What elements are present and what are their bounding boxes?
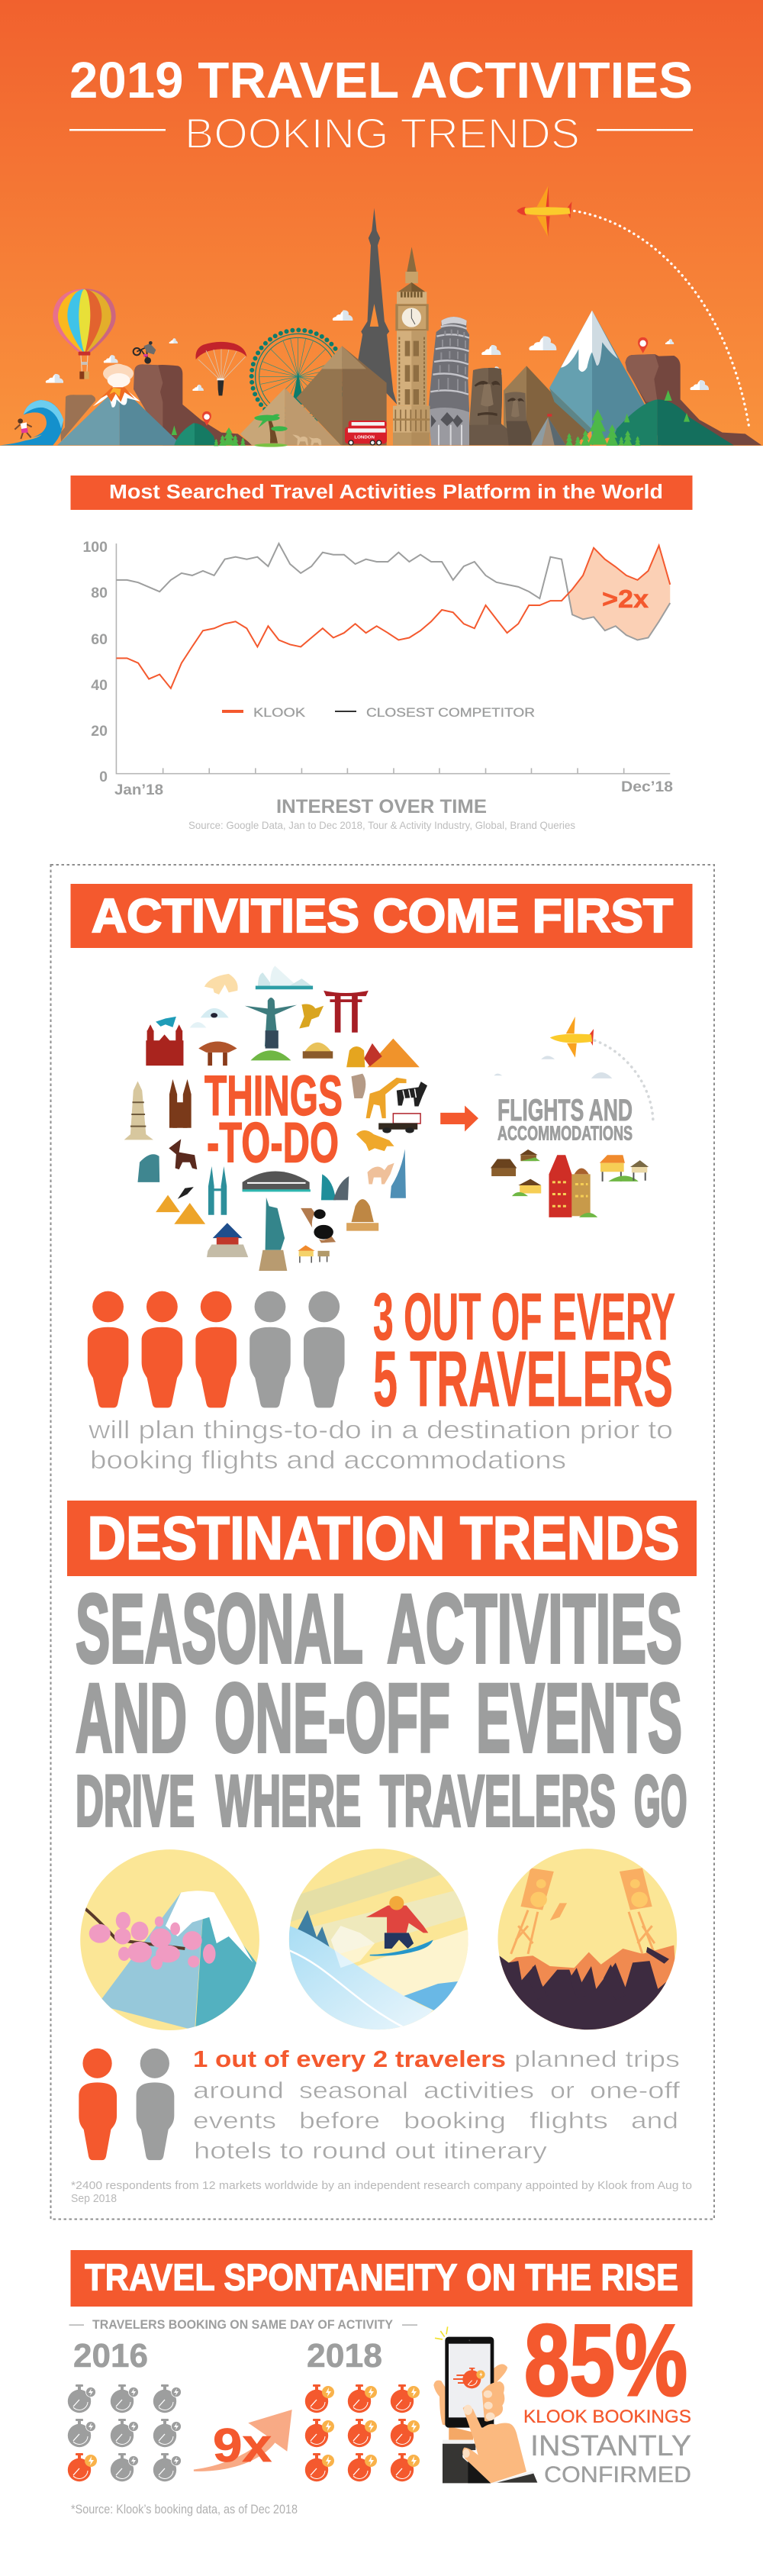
- icon: green hill and pine trees: [172, 411, 246, 446]
- icon: hot air balloon: [53, 289, 116, 379]
- text: one out of every two travelers: and: [631, 2107, 678, 2134]
- text: one out of every two travelers: events: [193, 2107, 276, 2134]
- text: GO: [634, 1761, 687, 1842]
- icon: snowy mountain: [549, 311, 645, 445]
- red cathedral: [146, 1024, 183, 1066]
- y axis labels: 0: [99, 769, 108, 785]
- illustration: travel landmarks skyline: [0, 185, 761, 447]
- icon: london bus: LONDON: [354, 435, 375, 440]
- right half of skyline: [393, 282, 761, 446]
- heading: seasonal activities and one-off events: WHERE: [216, 1761, 361, 1842]
- y axis labels: 40: [91, 677, 108, 694]
- years: 2016: [73, 2337, 148, 2374]
- text: one out of every two travelers: [193, 2046, 680, 2164]
- arrow: [440, 1105, 478, 1131]
- icon: paraglider: [195, 342, 246, 395]
- line chart: interest over time: [82, 539, 673, 831]
- icon: pine trees right: [565, 409, 641, 446]
- toucan: [178, 1187, 194, 1199]
- competitor line: [116, 543, 670, 640]
- icon: green hill: [610, 337, 734, 445]
- christ the redeemer: [245, 998, 297, 1060]
- sphinx and pyramids: [346, 1039, 420, 1067]
- text: one out of every two travelers: booking: [404, 2107, 506, 2134]
- icon: clouds right: [481, 336, 709, 390]
- temple of heaven: [207, 1223, 248, 1257]
- things to do heading: [204, 1064, 343, 1174]
- heading: seasonal activities and one-off events: [76, 1575, 687, 1842]
- x axis labels: [114, 779, 673, 798]
- text: one out of every two travelers: or: [550, 2077, 575, 2104]
- stepped pyramids: [156, 1195, 205, 1224]
- icon: big ben spire: [405, 247, 418, 283]
- text: one out of every two travelers: around: [193, 2077, 284, 2104]
- y axis labels: 20: [91, 723, 108, 740]
- text: plan things to do first: booking flights and accommodations: [90, 1446, 566, 1474]
- subheading: same day bookings: TRAVELERS BOOKING ON SAME DAY OF ACTIVITY: [92, 2318, 393, 2332]
- text: one out of every two travelers: planned trips: [514, 2046, 680, 2072]
- icon: tent: [532, 414, 566, 445]
- x axis labels: Dec’18: [621, 779, 673, 795]
- y axis labels: 60: [91, 631, 108, 648]
- butterflies: [156, 1017, 176, 1027]
- torii gate: [324, 991, 369, 1033]
- panda: [301, 1208, 336, 1243]
- igloos: [190, 1008, 229, 1027]
- stat: 9x: 9x: [213, 2420, 272, 2472]
- burj al arab: [391, 1149, 406, 1198]
- tower: [124, 1082, 153, 1140]
- flights and accommodations heading: FLIGHTS AND: [497, 1094, 633, 1127]
- text: plan things to do first: will plan things-to-do in a destination prior to: [88, 1415, 673, 1444]
- icon: london bus: [345, 421, 387, 445]
- legend: CLOSEST COMPETITOR: [366, 705, 535, 720]
- footnote: booking data source: *Source: Klook’s booking data, as of Dec 2018: [71, 2502, 298, 2516]
- text: klook bookings instantly confirmed: [523, 2407, 691, 2487]
- left half of skyline: [0, 289, 387, 447]
- icon: biker on rock: [134, 341, 156, 364]
- flights and accommodations heading: ACCOMMODATIONS: [497, 1124, 633, 1145]
- text: one out of every two travelers: 1 out of every 2 travelers: [193, 2046, 506, 2072]
- text: plan things to do first: [88, 1415, 673, 1474]
- text: one out of every two travelers: one-off: [590, 2077, 680, 2104]
- banner: travel spontaneity: TRAVEL SPONTANEITY ON THE RISE: [85, 2258, 678, 2299]
- illustration: concert crowd: [497, 1849, 679, 2030]
- safari jeep: [378, 1114, 420, 1133]
- callout: >2x: >2x: [602, 585, 649, 613]
- icon: tall rock right: [625, 354, 761, 445]
- banner: activities come first: ACTIVITIES COME FIRST: [92, 890, 673, 943]
- dome: [303, 1043, 333, 1059]
- text: one out of every two travelers: hotels to round out itinerary: [194, 2137, 548, 2164]
- buddha: [346, 1199, 378, 1231]
- text: one out of every two travelers: activities: [423, 2077, 534, 2104]
- stilt huts: [298, 1245, 330, 1263]
- stat: 3 out of every 5 travelers: [373, 1280, 675, 1423]
- icons: one of two people: [79, 2049, 174, 2160]
- icon: tall rock: [134, 364, 253, 445]
- asian gate: [198, 1042, 237, 1066]
- y axis labels: 80: [91, 585, 108, 601]
- icon: moai statues: [463, 368, 532, 445]
- heading: seasonal activities and one-off events: DRIVE: [76, 1761, 195, 1842]
- years: 2018: [307, 2337, 382, 2374]
- heading: seasonal activities and one-off events: ONE-OFF: [214, 1664, 450, 1773]
- banner: destination trends: DESTINATION TRENDS: [87, 1504, 679, 1572]
- title: 2019 TRAVEL ACTIVITIES: [69, 52, 693, 109]
- moai blue: [137, 1154, 159, 1182]
- icon: eiffel tower: [358, 208, 397, 405]
- icon: volcano mountain: [57, 364, 182, 445]
- icons: accommodation buildings: [491, 1149, 649, 1217]
- years: [73, 2337, 382, 2374]
- statue of liberty: [259, 1198, 287, 1271]
- icon: airplane with dotted path: [517, 185, 749, 430]
- x axis labels: Jan’18: [114, 782, 163, 798]
- icons: 2016 stopwatches: [68, 2384, 182, 2481]
- icon: clouds left: [46, 310, 353, 391]
- header background: [0, 0, 763, 446]
- icon: leaning tower of pisa: [429, 317, 469, 445]
- camel: [368, 1163, 394, 1184]
- shaded gap area: [568, 546, 670, 640]
- chart axes and ticks: [116, 543, 670, 774]
- koala: [351, 1074, 365, 1098]
- legend: [222, 705, 535, 720]
- harbour bridge: [243, 1171, 311, 1191]
- icon: ferris wheel: [252, 330, 345, 423]
- text: klook bookings instantly confirmed: INSTANTLY: [530, 2430, 691, 2462]
- icon: hand with phone: [433, 2326, 537, 2483]
- icons: 2018 stopwatches: [305, 2384, 420, 2481]
- polar bear: [204, 974, 238, 995]
- y axis labels: [82, 539, 108, 785]
- flights and accommodations heading: [497, 1094, 633, 1145]
- axis title: INTEREST OVER TIME: [276, 796, 487, 817]
- footnote: survey respondents: *2400 respondents from 12 markets worldwide by an independent research company appointed by Klook from Aug to: [71, 2179, 692, 2192]
- opera house: [256, 966, 313, 989]
- text: one out of every two travelers: seasonal: [299, 2077, 408, 2104]
- illustration: cherry blossom and mount fuji: [80, 1849, 262, 2042]
- text: klook bookings instantly confirmed: CONFIRMED: [544, 2462, 691, 2487]
- deer: [169, 1139, 197, 1169]
- icon: airplane and faded clouds: [494, 1017, 653, 1121]
- panel: dotted frame: [50, 865, 714, 2220]
- klook line: [116, 546, 670, 688]
- text: one out of every two travelers: before: [299, 2107, 380, 2134]
- text: one out of every two travelers: flights: [530, 2107, 608, 2134]
- icon: pyramids: [240, 346, 387, 447]
- title: [69, 52, 693, 157]
- banner: most searched platform: Most Searched Travel Activities Platform in the World: [109, 482, 663, 503]
- y axis labels: 100: [82, 539, 108, 556]
- illustration: snowboarder: [289, 1849, 468, 2030]
- things to do heading: THINGS: [204, 1064, 343, 1127]
- icon: small rock: [60, 395, 95, 441]
- footnote: survey respondents: Sep 2018: [71, 2192, 117, 2205]
- icon: big ben tower: [393, 282, 430, 445]
- lion: [356, 1130, 394, 1151]
- arrow: growth: [194, 2410, 292, 2471]
- icon: surfer on wave: [0, 400, 63, 445]
- icons: three of five people: [88, 1291, 345, 1407]
- zebra: [397, 1082, 427, 1106]
- title: BOOKING TRENDS: [185, 109, 580, 157]
- icons: things to do landmarks circle: [124, 966, 427, 1271]
- kangaroo: [299, 1004, 324, 1029]
- gothic church: [169, 1079, 192, 1128]
- banner: travel spontaneity: [70, 2250, 693, 2307]
- icon: brown pyramid: [504, 366, 589, 445]
- footnote: survey respondents: [71, 2179, 692, 2205]
- source note: Source: Google Data, Jan to Dec 2018, Tour & Activity Industry, Global, Brand Queries: [188, 819, 575, 831]
- legend: KLOOK: [253, 705, 306, 720]
- heading: seasonal activities and one-off events: SEASONAL: [76, 1575, 363, 1684]
- text: klook bookings instantly confirmed: KLOOK BOOKINGS: [523, 2407, 691, 2427]
- giraffe: [366, 1078, 407, 1118]
- heading: seasonal activities and one-off events: AND: [76, 1664, 187, 1773]
- app stopwatch glyph: [453, 2368, 485, 2388]
- twin towers: [208, 1166, 227, 1215]
- things to do heading: -TO-DO: [207, 1111, 339, 1174]
- banner: most searched platform: [70, 476, 693, 510]
- stat: 85 percent: 85%: [524, 2304, 687, 2417]
- lotus building: [321, 1174, 349, 1200]
